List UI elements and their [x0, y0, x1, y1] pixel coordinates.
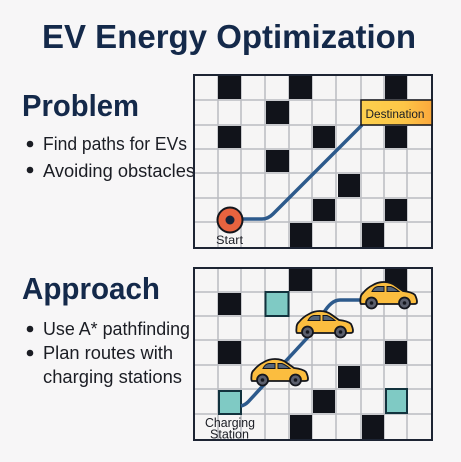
text block: problem bullets: Avoiding obstacles — [43, 161, 195, 181]
text block: approach bullets: Plan routes with — [43, 343, 173, 363]
text block: approach bullets — [27, 319, 190, 387]
text block: approach bullets: Use A* pathfinding — [43, 319, 190, 339]
charging station label: Station — [210, 428, 249, 442]
start marker: Start — [216, 233, 244, 247]
route path — [232, 125, 362, 219]
text block: problem bullets: Find paths for EVs — [43, 134, 187, 154]
car 1 — [251, 359, 308, 386]
charging stations — [219, 292, 407, 414]
heading: Approach: Approach — [22, 271, 160, 306]
panel: problem grid — [194, 75, 432, 248]
destination label — [361, 100, 432, 125]
panel: approach grid — [194, 268, 432, 442]
text block: problem bullets — [27, 134, 195, 181]
car 3 — [360, 282, 417, 308]
charging station label: Charging — [205, 416, 255, 430]
charging station label — [205, 416, 255, 442]
destination label: Destination — [366, 109, 424, 121]
car 2 — [296, 311, 353, 338]
obstacles — [218, 76, 407, 247]
obstacles — [218, 269, 407, 439]
title: EV Energy Optimization — [42, 18, 416, 55]
route path — [241, 300, 365, 406]
heading: Problem: Problem — [22, 88, 139, 123]
text block: approach bullets: charging stations — [43, 367, 182, 387]
start marker — [216, 208, 244, 247]
